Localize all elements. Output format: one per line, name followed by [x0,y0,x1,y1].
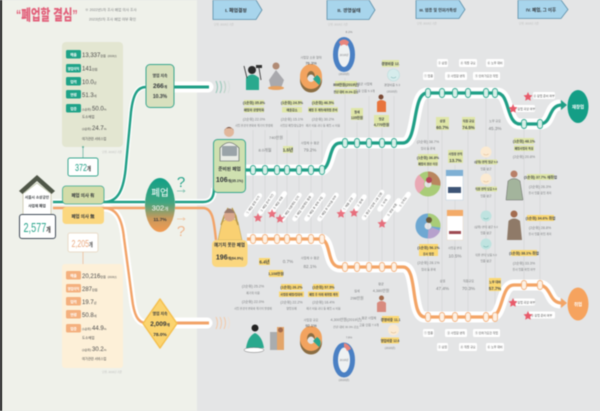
icon: shop orange with stat: 사업장 면적 [448,246,462,250]
panel: no-intent business profile: (2순위) 30.2% [82,347,107,353]
text group: plans teal: 폐업사업자 특징 [515,146,534,150]
text group: I. motives orange: 사업 환경의 변화와 위기의 발생에 [234,306,272,310]
unplanned closure box with person icon: 예기치 못한 폐업 [214,242,245,248]
text group: I. planning teal: (2순위) 30.2% [312,116,335,122]
icon: seated person top [268,62,284,90]
panel: closure-intent business profile: 도소매업 [82,114,94,119]
ellipse: closed businesses [145,178,175,232]
panel: closure-intent business profile: 여가관련 서비스업 [82,136,106,141]
panel: closure-intent business profile: 10.0년 [82,80,97,86]
panel: closure-intent business profile: 영업이익 [68,66,79,71]
stats teal section III: 74.5% [462,125,475,130]
text group: I. planning orange: (1순위) 57.5% [312,284,335,290]
stats section II orange: 4,300만원(2019년) [331,317,362,322]
text group: I. planning teal: (1순위) 46.5% [312,100,335,105]
text and donut: industry orange: 임대 등 문제 [421,268,436,272]
donut chart bottom: revenue change: (2020년) [339,378,349,382]
pills above teal section III: ④ 직원 규모 [460,60,476,65]
count box: 2,205 businesses: 2,205개 [72,238,93,249]
panel: no-intent business profile: 업력 [70,299,77,304]
icon: shop teal with stat [446,150,463,200]
donut chart bottom: ownership: 사업장 규모 [304,317,319,322]
faces teal section III: 업종 평균 [480,194,492,198]
diagonal pills with stars: closure decision items: ⑥ 만족도 [397,195,408,208]
stats below orange section I: 82.1% [303,264,317,269]
text group: I. planning orange [306,284,341,310]
box: continuing business top [146,64,174,108]
stats teal section III: 노무 규모 [489,118,501,123]
end point: re-start [568,90,588,123]
diagonal pills with stars: closure decision items: ④ 부채 [379,197,388,208]
star pills orange: after closure: ⑦ 창업 희망 여부 [514,299,535,304]
end point: employment: 취업 [574,301,582,308]
text group: I. planning orange: 폐기 비용 과다 등 폐업 시 비용 [306,306,341,310]
section header: IV [518,0,568,26]
icon: shop teal with stat: 13.7% [449,158,462,163]
faces orange section III: (상위) 면적 평균 5.0 [474,225,498,229]
icon and text: re-employment teal: (1순위) 37.7% 재취업 [524,174,557,180]
stats section II orange [331,288,379,329]
diagonal pills with stars: closure decision items: ⑦ 폐업 후 어려움 여부 [318,194,338,219]
text and donut: industry orange: 유사 업종 [423,252,434,256]
pills above teal section III: ⑥ 노무 대비 [487,60,503,65]
faces teal section III: 업종 평균 [480,167,492,171]
pills above teal section III [423,59,504,80]
section header: III: III. 업종 및 인허가특성 [419,6,457,12]
donut chart bottom: revenue change: 7.8% [346,336,353,340]
stats teal section III: 상권 [440,118,445,123]
end point: re-start: 재창업 [572,104,584,110]
title: “폐업할 결심” [16,6,78,23]
stats above teal line section I: 8.0개월 [259,146,272,152]
diagonal pills with stars: closure decision items: ⑤ 경영 비중 [385,202,398,217]
stats section II orange: 월세 [354,288,360,293]
diagonal pills with stars: closure decision items: ⑥ 폐업 후 계획 수립 [305,195,324,218]
pills above teal section III: ② 상권 [438,60,447,65]
text group: I. reasons orange: 사업장 폐업/임대차 [280,292,303,296]
text group: I. motives orange [234,284,272,310]
text and donut: industry teal [417,139,440,192]
stats below orange section I: 1,108만원 [268,271,284,276]
panel: closure-intent business profile: (2순위) 24.7% [82,126,107,132]
panel: closure-intent business profile: 업력 [70,79,77,84]
donut chart top: revenue change: 2019년 [340,53,349,57]
stats section II teal [333,81,375,120]
text and donut: industry orange [417,217,440,272]
panel: no-intent business profile: 여가관련 서비스업 [82,356,106,361]
count box: 372 businesses: 372개 [75,162,91,173]
diamond: continuing business bottom: 영업 지속 [152,311,168,316]
diagonal pills with stars: closure decision items: ⑤ 폐업 지원제도 활용 [293,194,312,219]
panel: no-intent business profile: 업종 [70,326,77,331]
donut chart top: revenue change [336,30,353,76]
icon and text: re-employment teal [506,170,557,200]
text group: I. motives teal [235,100,273,128]
icon: shop orange with stat [447,210,463,258]
satisfaction score teal with face: 경영비중 12. [381,61,400,66]
star pills teal: after closure: ⑦ 창업 희망 여부 [514,106,535,111]
stats section II teal: 평균 사업체 [358,81,373,86]
ellipse: closed businesses: 폐업 [151,187,169,199]
text group: I. motives teal: 사업 환경의 변화와 위기의 발생에 [235,124,273,128]
teal transit line to re-start [245,88,567,174]
person icon and loan stat teal [374,94,390,127]
panel: no-intent business profile: 도소매업 [82,335,94,340]
pills below orange section III: ③ 사업장 면적 [447,330,465,335]
satisfaction score orange with face: (2020년) [385,346,395,350]
stats section II teal: 135만원 [351,115,363,120]
pills below orange section III: ⑤ 인허가요건 작업 [475,330,498,335]
text group: I. motives teal: (2순위) 22.0% [243,116,266,122]
faces teal section III: (상위) 면적 평균 5.0 [474,160,498,164]
text and donut: industry orange: (2순위) 28.1% [417,260,440,265]
person icon and loan stat teal: 평균 [379,116,384,121]
stats below orange section I: 0.7% [283,259,293,264]
pills below orange section III [423,329,504,351]
prepared closure box with person icon [214,127,246,192]
stats teal section III [436,117,502,131]
text group: I. motives orange: (2순위) 22.0% [242,299,265,304]
text group: I. reasons teal [280,100,304,128]
icon and text: re-employment teal: (2순위) 26.3% [529,184,552,189]
panel: closure-intent business profile [62,42,123,158]
panel: no-intent business profile [62,264,123,374]
prepared closure box with person icon: 106개(35.1%) [216,177,243,184]
panel: no-intent business profile: (1순위) 44.9% [82,326,107,332]
icon: group of people [244,324,264,352]
icon and text: employment first: (2순위) 28.8% [529,225,552,230]
icon: house with business survey label: 사업체 폐업 [28,203,46,208]
main orange flow line toward continuing and unplanned paths [53,208,216,323]
text group: plans teal: (1순위) 48.1% [513,138,536,144]
count box: 2,577 total [20,214,56,238]
subtitle note: ※ 2022년1차 조사 폐업 의사 조사 [85,7,137,12]
stats above teal line section I: 740만원 [269,134,283,140]
icon: person with binoculars [244,65,262,90]
donut chart top: ownership: 76.3% [305,60,317,66]
stats section II teal: 전년 대비 35.3% 감소 [334,90,359,94]
stats section II orange: 평균 사업체 [362,315,377,320]
diagonal pills with stars: closure decision items: ① 매출 규모 [341,196,354,211]
diamond: continuing business bottom: 2,009개 [150,321,170,328]
stats orange section III: 57.7% [489,286,501,291]
diamond: continuing business bottom: 78.0% [153,332,168,338]
stats orange section III: 직원규모 [463,278,474,283]
donut chart bottom: revenue change [336,336,353,382]
text group: I. reasons orange [279,284,304,310]
chevrons: continuing business bottom [216,317,230,329]
stats above teal line section I: 사업체 수 평균 [301,140,319,145]
faces orange section III: 업종 평균 [480,259,492,263]
panel: closure-intent business profile: 업종 [70,106,77,111]
faces orange section III: 업종 평균 [480,231,492,235]
stats orange section III: 노무 대비 [489,279,501,284]
panel: closure-intent business profile: 단위: 2019년 기준 [102,150,123,154]
stats section II teal: 고용 인원 5.3개 [355,88,375,93]
text group: I. planning teal [306,100,341,128]
pills below orange section III: ① 업종 [424,330,433,335]
diagonal pills with stars: closure decision items: ③ 폐업 비용 [271,195,284,210]
star pills orange: after closure [508,298,555,320]
diamond: continuing business bottom [143,299,177,348]
text and donut: industry orange: (1순위) 56.1% [417,245,440,250]
text and donut: industry teal: (1순위) 36.8% [417,155,440,160]
panel: no-intent business profile: 영업이익 [68,286,79,291]
unplanned closure box with person icon: 196개(64.9%) [216,254,243,262]
stats orange section III: 47.4% [436,286,449,291]
text and donut: industry teal: 폐업의 원인 이유 [418,162,438,166]
icon: house with business survey label: 서울시 소상공인 [25,194,49,200]
faces orange section III: 직원 면적 낮음 5.0 [475,253,497,257]
icon: shop orange with stat: 10.5% [448,254,462,258]
stats section II orange: 고용 인원 7.0개 [359,322,379,327]
icon: house with business survey label [19,175,55,215]
unplanned closure box with person icon [212,208,248,267]
section header: III [416,0,465,26]
pills above teal section III: ⑤ 인허가요건 작업 [475,73,498,78]
count box: 2,205 businesses [68,233,98,264]
satisfaction score orange with face [381,316,401,350]
text group: I. reasons teal: 사업장 폐업/양도양수 [280,124,304,128]
icon: shop teal with stat: 사업장 면적 [449,152,463,156]
text group: I. planning orange: (2순위) 16.4% [312,300,335,304]
section header: IV: 단위: 2019년 기준 [519,22,539,26]
text group: I. motives teal: (1순위) 35.8% [243,100,266,105]
label: no intent to close [62,207,104,224]
panel: closure-intent business profile: 연령 [70,92,77,97]
section header: II: II. 경영실태 [338,7,360,14]
star pills orange: after closure: ⑧ 창업 준비 여부 [531,312,552,317]
text group: I. motives orange: (2순위) 25.2% [242,284,265,288]
label: no intent to close: 폐업 의사 無 [72,213,95,220]
text group: I. reasons teal: 매출감소 [286,107,298,112]
diagonal pills with stars: closure decision items: ③ 평균 사업체 고용 인원 [362,191,383,218]
section header: II [327,0,375,26]
panel: no-intent business profile: 연령 [70,312,77,317]
text group: employment second: (1순위) 38.1% 취업 [509,250,539,256]
panel: no-intent business profile: 50.8세 [82,313,97,319]
text and donut: industry teal: (2순위) 38.7% [417,139,440,144]
prepared closure box with person icon: 준비된 폐업 [218,166,241,172]
person icon and loan stat orange [373,281,390,312]
text group: I. planning teal: 폐업 후 계획/재취업 준비 [309,108,338,112]
stats section II teal: 808만원(2019년) [333,82,359,87]
donut chart top: revenue change: (2020년) [339,72,349,76]
panel: no-intent business profile: 매출 [70,273,77,278]
satisfaction score orange with face: 영업비중 12.6 [381,338,400,343]
panel: no-intent business profile: 287만원 [82,287,98,293]
stats section II orange: 전년 대비 30.3% 감소 [333,325,359,329]
star pills teal: after closure [508,92,555,113]
pills below orange section III: ④ 직원 규모 [460,344,476,349]
count box: 2,577 total: 2,577개 [24,222,51,235]
label: intends to close [62,186,104,204]
text group: I. planning orange: 폐업 후 미래 재취업 계획 [309,292,338,296]
donut chart bottom: ownership: 92.1% [305,323,317,328]
panel: closure-intent business profile: 51.3세 [82,93,97,99]
box: continuing business top: 영업 지속 [152,73,168,78]
donut chart top: ownership: 사업장 소유 형태 [300,54,322,60]
stats section II orange: 298만원 [350,296,364,300]
section header: II: 단위: 2019년 기준 [328,22,348,26]
text group: I. planning teal: 폐기 비용 과다 등 폐업 시 비용 [306,124,341,128]
donut chart bottom: ownership [304,317,321,351]
ellipse: closed businesses: 11.7% [153,217,167,223]
satisfaction score teal with face: 경영비중 5.3 [384,82,400,87]
panel: closure-intent business profile: 매출 [70,52,77,57]
stats teal section III: 45.3% [488,126,502,131]
section header: I: 단위: 2019년 기준 [214,22,234,26]
person icon and loan stat orange: 4,380만원 [373,288,390,293]
person icon and loan stat teal: 4,770만원 [374,122,390,127]
main teal flow line from businesses to resumed business path [53,87,214,202]
count box: 372 businesses [68,158,98,176]
icon and text: employment first [507,210,555,240]
stats below orange section I [259,255,319,277]
diagonal pills with stars: closure decision items: ② 폐업 준비 기간 [258,192,275,213]
stats teal section III: 60.7% [436,125,449,130]
icon and text: employment first: (1순위) 34.6% 취업 [526,216,555,220]
text group: I. reasons orange: (1순위) 26.2% [280,284,303,290]
question mark below: orange path: ? [177,223,185,240]
text group: I. reasons teal: (2순위) 15.1% [281,116,304,122]
donut chart bottom: revenue change: 2019년 [340,358,349,362]
question mark above: teal path: ? [177,174,185,191]
satisfaction score orange with face: 경영비중 11.1 [381,317,401,322]
section header: I [213,0,262,26]
stats below orange section I: 6.4년 [259,258,270,264]
panel: closure-intent business profile: 141만원 [82,66,98,72]
stats orange section III: 70.3% [462,286,475,291]
chevrons: continuing business top [216,81,230,93]
text and donut: industry teal: 임대 등 문제 [421,146,436,150]
person icon and loan stat orange: 평균 [378,281,384,286]
box: continuing business top: 10.3% [153,94,168,100]
stats teal section III: 직원 규모 [463,118,475,123]
subtitle note: 2023년2차 조사 폐업 여부 확인 [89,16,136,22]
text group: plans teal: (2순위) 20.8% [513,154,536,159]
text group: employment second: (2순위) 33.3% [513,260,536,266]
pills above teal section III: ① 업종 [424,73,433,78]
satisfaction score teal with face [381,60,400,94]
text group: employment second [509,250,539,272]
section header: I: I. 폐업결정 [225,7,247,14]
star pills teal: after closure: ⑧ 창업 준비 여부 [533,93,555,98]
stats above teal line section I: 1.5년 [283,146,293,152]
pills above teal section III: ③ 사업장 면적 [447,73,465,78]
diagonal pills with stars: closure decision items: ① 폐업 결정 시기 [244,194,261,215]
text group: I. motives orange: 폐기의 이용 [246,291,260,295]
subtitle note [85,7,137,22]
text group: I. reasons teal: (1순위) 24.5% [281,100,304,105]
text group: plans teal [513,138,536,159]
vertical connector lines on the process panel [253,78,540,317]
faces teal section III [474,146,498,198]
stats orange section III: 상권 [440,278,445,283]
panel: no-intent business profile: 19.7년 [82,300,97,306]
stats above teal line section I [259,134,319,153]
panel: closure-intent business profile: (1순위) 50.0% [82,106,107,112]
satisfaction score teal with face: (2020년) [387,90,397,94]
orange transit line to employment [247,234,567,322]
text group: employment second: 유사 업종 취업 여부 [513,268,536,272]
section header: III: 단위: 2019년 기준 [417,22,437,26]
end point: employment [568,288,588,320]
text group: I. motives teal: 폐업의 경영악화 [244,107,264,112]
faces orange section III [474,210,498,263]
faces teal section III: 직원 면적 낮음 5.0 [475,187,497,191]
panel: no-intent business profile: 20,216만원 (2019년) [82,274,117,280]
donut chart top: ownership [300,54,322,89]
label: intends to close: 폐업 의사 有 [72,192,95,199]
donut chart top: revenue change: 8.2% [346,30,353,34]
diagonal pills with stars: closure decision items: ② 월세 [355,197,364,208]
stats above teal line section I: 79.2% [304,148,316,152]
panel: closure-intent business profile: 13,337만원 (2019년) [82,53,117,59]
diagonal pills with stars: closure decision items [243,189,412,228]
diagonal pills with stars: closure decision items: ④ 폐업 지원제도 인지 [281,194,300,219]
text group: I. reasons orange: 영업실패 [286,306,297,310]
pills below orange section III: ⑥ 노무 대비 [487,344,503,349]
text group: I. reasons orange: (2순위) 22.2% [280,300,303,304]
stats orange section III [436,278,501,291]
box: continuing business top: 266개 [153,83,167,90]
stats below orange section I: 사업체 수 평균 [301,255,319,260]
section header: IV: IV. 폐업, 그 이후 [526,6,556,14]
stats section II teal: 월세 [354,109,360,114]
icon and text: employment first: 유사 업종 취업 계획 [529,232,552,236]
icon and text: re-employment teal: 유사 업종 창업 계획 [529,191,552,195]
icon: buildings and person [270,327,284,350]
pills below orange section III: ② 상권 [438,344,447,349]
panel: no-intent business profile: 단위: 2019년 기준 [102,370,123,374]
ellipse: closed businesses: 302개 [152,204,168,212]
